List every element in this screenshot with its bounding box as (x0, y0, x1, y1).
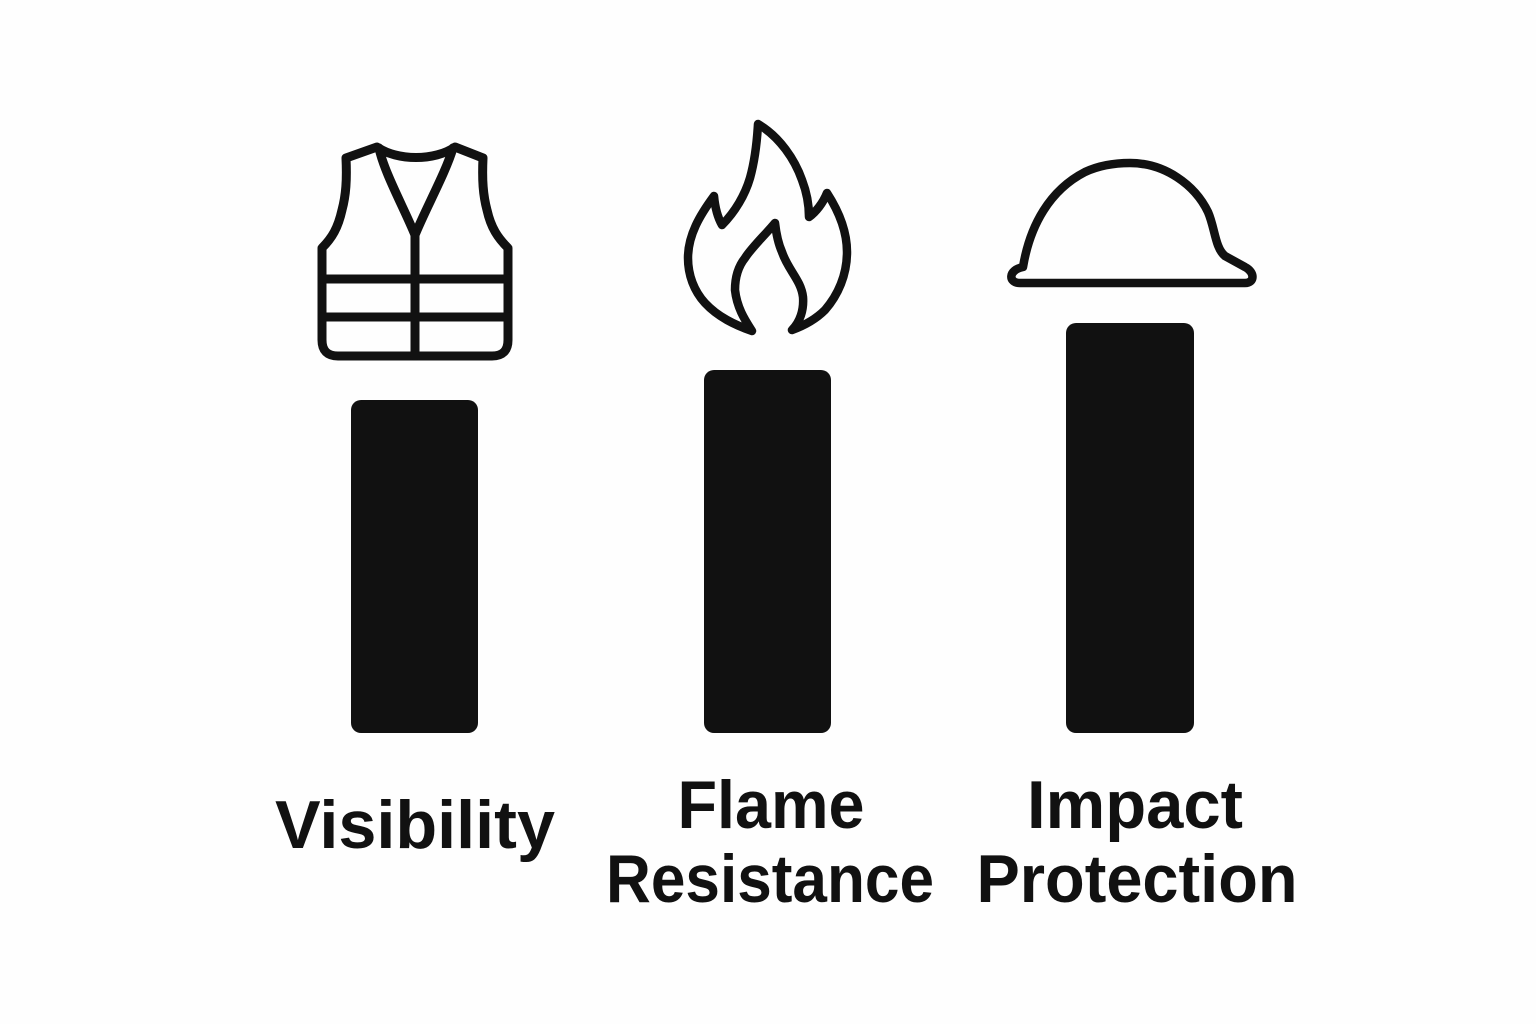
label: flame resistance (606, 767, 934, 917)
bar: flame resistance (704, 370, 831, 733)
icon: hard hat (1011, 163, 1252, 283)
label: visibility: Visibility (275, 787, 555, 863)
icon: safety vest (322, 147, 508, 356)
bar: impact protection (1066, 323, 1194, 733)
bar: visibility (351, 400, 478, 733)
label: flame resistance: Resistance (606, 841, 934, 917)
label: impact protection: Protection (976, 841, 1298, 917)
icon: flame (688, 124, 847, 331)
label: flame resistance: Flame (678, 767, 864, 843)
label: impact protection: Impact (1027, 767, 1243, 843)
label: impact protection (976, 767, 1298, 917)
